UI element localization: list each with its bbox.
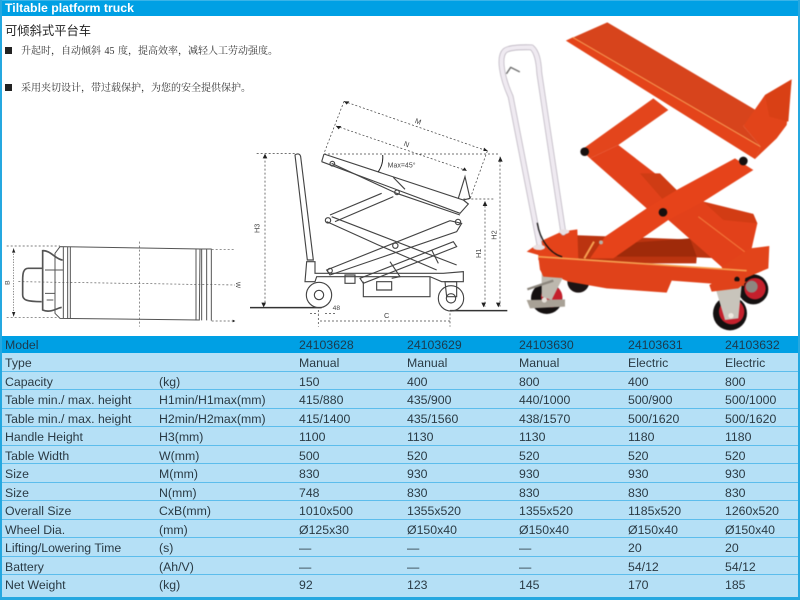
row: lifting time: (s) <box>159 541 173 555</box>
row: type: Manual <box>519 356 559 370</box>
scissor arms <box>330 193 393 222</box>
row: lifting time: — <box>299 541 311 555</box>
row: handle height: Handle Height <box>5 430 83 444</box>
row: overall size: 1260x520 <box>725 504 779 518</box>
row: battery <box>2 556 798 575</box>
row: table width: 520 <box>628 448 649 462</box>
dimension lines <box>257 101 500 327</box>
tilted table <box>322 154 470 213</box>
header row: 24103631 <box>628 338 683 352</box>
row: battery: (Ah/V) <box>159 560 194 574</box>
row: wheel diameter: Ø150x40 <box>725 522 775 536</box>
row: table width <box>2 446 798 464</box>
braked front wheel <box>527 269 570 314</box>
header row: 24103630 <box>519 338 574 352</box>
row: size N: 830 <box>519 486 540 500</box>
row: size M <box>2 464 798 482</box>
upper scissor arm <box>581 98 668 158</box>
handle sockets <box>533 245 545 250</box>
row: capacity: 400 <box>628 374 649 388</box>
handle <box>295 154 313 260</box>
row: battery: — <box>519 560 531 574</box>
row: table width: W(mm) <box>159 448 199 462</box>
row: net weight: 170 <box>628 578 649 592</box>
row: net weight: (kg) <box>159 578 180 592</box>
header row: 24103632 <box>725 338 780 352</box>
header row <box>2 336 798 353</box>
row: table width: 500 <box>299 448 320 462</box>
header row: 24103629 <box>407 338 462 352</box>
header row: Model <box>5 338 38 352</box>
row: type: Type <box>5 356 32 370</box>
bullet one text: 升起时，自动倾斜 45 度，提高效率，减轻人工劳动强度。 <box>21 46 278 57</box>
row: capacity: 800 <box>519 374 540 388</box>
row: table width: 520 <box>407 448 428 462</box>
row: table width: 520 <box>725 448 746 462</box>
row: H2: H2min/H2max(mm) <box>159 412 266 426</box>
row: H2: 438/1570 <box>519 412 570 426</box>
row: H2: 415/1400 <box>299 412 350 426</box>
row: wheel diameter <box>2 520 798 538</box>
row: wheel diameter: Ø150x40 <box>519 522 569 536</box>
frame front rail <box>538 257 747 293</box>
row: overall size <box>2 501 798 520</box>
row: H1: Table min./ max. height <box>5 393 131 407</box>
row: capacity: 800 <box>725 374 746 388</box>
bullet one marker <box>5 47 12 54</box>
row: size N: 830 <box>407 486 428 500</box>
row: type: Electric <box>725 356 765 370</box>
row: battery: — <box>407 560 419 574</box>
title bar: Tiltable platform truck <box>5 1 134 15</box>
bullet two text: 采用夹切设计，带过载保护，为您的安全提供保护。 <box>21 83 251 94</box>
row: table width: 520 <box>519 448 540 462</box>
row: overall size: 1355x520 <box>519 504 573 518</box>
row: table width: Table Width <box>5 448 69 462</box>
row: overall size: 1010x500 <box>299 504 353 518</box>
side view line drawing with dimensions: Max=45° <box>388 161 416 169</box>
row: size M: 930 <box>628 467 649 481</box>
side view line drawing with dimensions: M <box>414 116 423 127</box>
rear wheels <box>567 271 589 293</box>
row: battery: 54/12 <box>725 560 756 574</box>
handle mount plate <box>527 229 578 260</box>
row: lifting time: — <box>407 541 419 555</box>
chinese heading: 可倾斜式平台车 <box>5 24 91 38</box>
row: H1 <box>2 390 798 408</box>
front swivel wheel <box>709 281 747 330</box>
row: lifting time: 20 <box>628 541 642 555</box>
row: size M: 830 <box>299 467 320 481</box>
row: net weight: 92 <box>299 578 313 592</box>
wheels <box>306 282 332 308</box>
row: handle height: 1130 <box>519 430 545 444</box>
row: size N: 830 <box>725 486 746 500</box>
row: type: Manual <box>407 356 447 370</box>
pivot bolts <box>580 147 589 156</box>
row: wheel diameter: Ø125x30 <box>299 522 349 536</box>
pivots <box>330 161 335 166</box>
row: handle height: 1180 <box>725 430 751 444</box>
row: net weight: 185 <box>725 578 746 592</box>
row: wheel diameter: Ø150x40 <box>407 522 457 536</box>
cylinder <box>360 242 457 283</box>
platform end stop <box>743 79 792 159</box>
row: capacity: 150 <box>299 374 320 388</box>
top view line drawing: W <box>234 282 241 289</box>
row: battery: 54/12 <box>628 560 659 574</box>
row: lifting time <box>2 538 798 556</box>
row: H1: 500/900 <box>628 393 672 407</box>
row: size M: Size <box>5 467 29 481</box>
row: handle height <box>2 427 798 446</box>
row: size M: 930 <box>725 467 746 481</box>
row: lifting time: Lifting/Lowering Time <box>5 541 121 555</box>
row: H2: Table min./ max. height <box>5 412 131 426</box>
row: size N <box>2 482 798 501</box>
frame right corner <box>722 246 769 278</box>
row: capacity: Capacity <box>5 374 53 388</box>
base <box>305 262 463 282</box>
tilt platform top <box>566 22 761 159</box>
row: wheel diameter: (mm) <box>159 522 188 536</box>
row: net weight: 145 <box>519 578 540 592</box>
row: handle height: 1130 <box>407 430 433 444</box>
row: overall size: Overall Size <box>5 504 71 518</box>
header row: 24103628 <box>299 338 354 352</box>
specification table <box>2 336 798 600</box>
side view line drawing with dimensions: H2 <box>490 230 499 240</box>
row: lifting time: — <box>519 541 531 555</box>
row: capacity <box>2 372 798 390</box>
side view line drawing with dimensions: C <box>384 311 390 320</box>
window under lift arm <box>696 257 722 269</box>
row: type: Manual <box>299 356 339 370</box>
row: size M: M(mm) <box>159 467 198 481</box>
row: H1: H1min/H1max(mm) <box>159 393 266 407</box>
row: H1: 415/880 <box>299 393 343 407</box>
row: wheel diameter: Ø150x40 <box>628 522 678 536</box>
row: lifting time: 20 <box>725 541 739 555</box>
row: size M: 930 <box>407 467 428 481</box>
frame inner deck <box>570 235 750 263</box>
row: overall size: 1355x520 <box>407 504 461 518</box>
row: net weight: Net Weight <box>5 578 66 592</box>
row: H2: 500/1620 <box>628 412 679 426</box>
lower scissor arm <box>590 145 757 268</box>
row: overall size: CxB(mm) <box>159 504 211 518</box>
row: H2: 435/1560 <box>407 412 458 426</box>
row: battery: — <box>299 560 311 574</box>
row: H1: 440/1000 <box>519 393 570 407</box>
side view line drawing with dimensions: H3 <box>252 224 261 233</box>
row: H1: 435/900 <box>407 393 451 407</box>
side view line drawing with dimensions: N <box>403 139 411 149</box>
row: capacity: (kg) <box>159 374 180 388</box>
row: net weight <box>5 578 746 592</box>
title bar <box>0 0 800 16</box>
row: type: Electric <box>628 356 668 370</box>
row: handle height: 1180 <box>628 430 654 444</box>
side view line drawing with dimensions: H1 <box>474 249 483 258</box>
row: net weight: 123 <box>407 578 428 592</box>
row: size N: 830 <box>628 486 649 500</box>
row: handle height: H3(mm) <box>159 430 203 444</box>
row: size M: 930 <box>519 467 540 481</box>
row: wheel diameter: Wheel Dia. <box>5 522 65 536</box>
side view line drawing with dimensions: 48 <box>333 305 340 312</box>
bullet two marker <box>5 84 12 91</box>
row: size N: 748 <box>299 486 320 500</box>
row: H2: 500/1620 <box>725 412 776 426</box>
handle <box>501 47 563 257</box>
row: battery: Battery <box>5 560 44 574</box>
row: overall size: 1185x520 <box>628 504 681 518</box>
ground lines <box>250 308 507 311</box>
row: size N: N(mm) <box>159 486 197 500</box>
row: type <box>2 353 798 372</box>
row: H2 <box>2 408 798 427</box>
top view line drawing: B <box>5 280 12 285</box>
row: H1: 500/1000 <box>725 393 776 407</box>
row: size N: Size <box>5 486 29 500</box>
row: handle height: 1100 <box>299 430 325 444</box>
long scissor arm <box>590 158 753 258</box>
row: capacity: 400 <box>407 374 428 388</box>
